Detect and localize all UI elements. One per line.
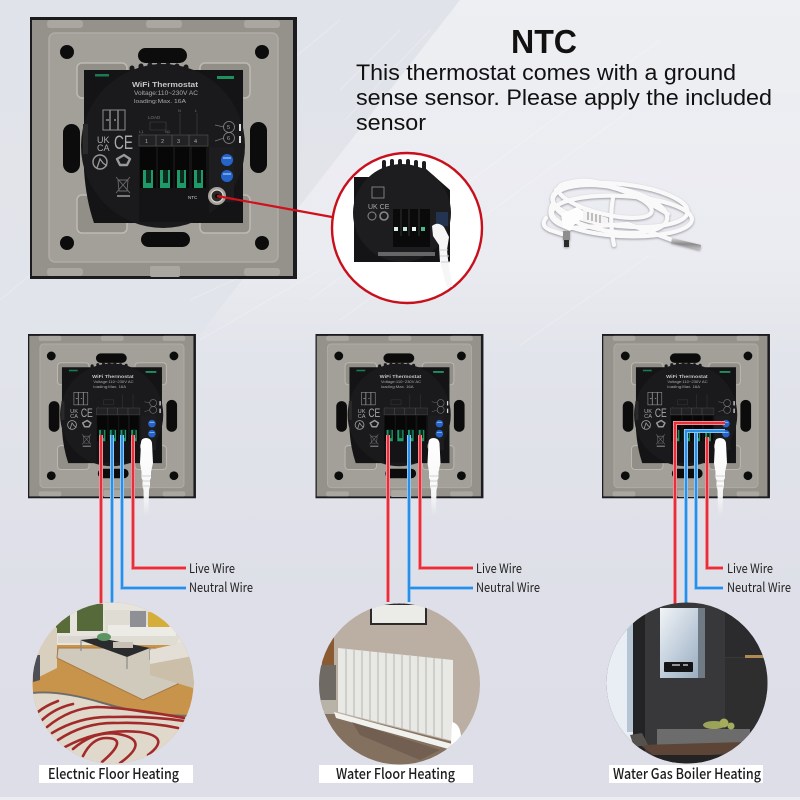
device label text: 1 xyxy=(145,139,148,145)
photo: living room with underfloor heating xyxy=(32,602,195,770)
device label text: N1 xyxy=(165,129,171,134)
icon: NTC sensor cable xyxy=(544,175,701,250)
thermostat back: UK xyxy=(70,409,78,415)
panel: electric floor heating thermostat wiring xyxy=(28,334,253,605)
caption: water floor heating: Water Floor Heating xyxy=(336,763,456,784)
thermostat back: loading:Max. 16A xyxy=(667,385,701,389)
icon: white sensor plug xyxy=(428,438,440,516)
wires xyxy=(675,423,725,605)
device label text: L1 xyxy=(139,129,144,134)
text block: description: sense sensor. Please apply the included xyxy=(356,85,772,110)
icon: white sensor plug xyxy=(140,438,153,516)
thermostat back: UK xyxy=(358,409,366,415)
text block: description: This thermostat comes with a ground xyxy=(356,60,736,85)
thermostat back xyxy=(316,334,483,498)
wire labels: Neutral Wire xyxy=(727,577,791,596)
thermostat back: WiFi Thermostat xyxy=(666,374,708,380)
thermostat back: WiFi Thermostat xyxy=(380,374,422,380)
device label text: LOAD xyxy=(148,115,161,120)
device label text: UK xyxy=(97,135,110,145)
wire labels xyxy=(476,558,540,596)
icon: white sensor plug xyxy=(714,438,727,516)
thermostat back: Voltage:110~230V AC xyxy=(381,379,421,384)
device label text: Voltage:110~230V AC xyxy=(134,90,199,97)
device label text: 3 xyxy=(177,139,180,145)
thermostat back: CA xyxy=(644,414,652,420)
device label text: 5 xyxy=(227,125,230,131)
device label text: N xyxy=(178,108,181,113)
wires xyxy=(388,435,473,602)
thermostat back: CE xyxy=(81,406,93,420)
text block: description: sensor xyxy=(356,110,427,135)
caption: water gas boiler heating: Water Gas Boiler Heating xyxy=(613,763,762,784)
thermostat back: CA xyxy=(70,414,78,420)
device label text: NTC xyxy=(188,195,198,200)
device label text: 6 xyxy=(227,136,230,142)
device label text: CE xyxy=(114,133,133,154)
thermostat back: Voltage:110~230V AC xyxy=(93,379,134,384)
device label text: 2 xyxy=(161,139,164,145)
wire labels: Live Wire xyxy=(727,558,773,577)
device label text: WiFi Thermostat xyxy=(132,80,199,89)
thermostat back: CA xyxy=(358,414,366,420)
wire labels xyxy=(727,558,791,596)
panel: gas boiler thermostat wiring xyxy=(602,334,791,605)
callout: zoomed NTC plug circle: UK CE xyxy=(368,204,390,211)
panel: water floor heating thermostat wiring xyxy=(316,334,540,602)
thermostat back: loading:Max. 16A xyxy=(93,385,127,389)
callout: zoomed NTC plug circle xyxy=(332,153,482,303)
device label text: CA xyxy=(97,143,110,153)
photo: wall gas boiler xyxy=(606,602,769,770)
arrow: red pointer line to zoom circle xyxy=(217,196,332,217)
wire labels: Live Wire xyxy=(189,558,235,577)
thermostat back: UK xyxy=(644,409,652,415)
wire labels: Neutral Wire xyxy=(189,577,253,596)
photo: wall radiator xyxy=(318,603,481,770)
panel: main thermostat back xyxy=(30,17,297,279)
thermostat back: WiFi Thermostat xyxy=(92,374,134,380)
wire labels xyxy=(189,558,253,596)
caption: electric floor heating: Electnic Floor Heating xyxy=(48,763,180,784)
device label text: L xyxy=(195,108,198,113)
wire labels: Neutral Wire xyxy=(476,577,540,596)
device label text: 4 xyxy=(194,139,197,145)
thermostat back: loading:Max. 16A xyxy=(381,385,414,389)
wire labels: Live Wire xyxy=(476,558,522,577)
thermostat back: Voltage:110~230V AC xyxy=(667,379,708,384)
device label text: loading:Max. 16A xyxy=(134,99,186,105)
device label text xyxy=(97,80,230,200)
wires xyxy=(101,435,186,605)
thermostat back xyxy=(28,334,196,498)
text block: description xyxy=(356,60,772,135)
thermostat back: CE xyxy=(368,406,380,420)
thermostat back xyxy=(602,334,770,498)
title: NTC xyxy=(511,23,577,60)
thermostat back: CE xyxy=(655,406,667,420)
